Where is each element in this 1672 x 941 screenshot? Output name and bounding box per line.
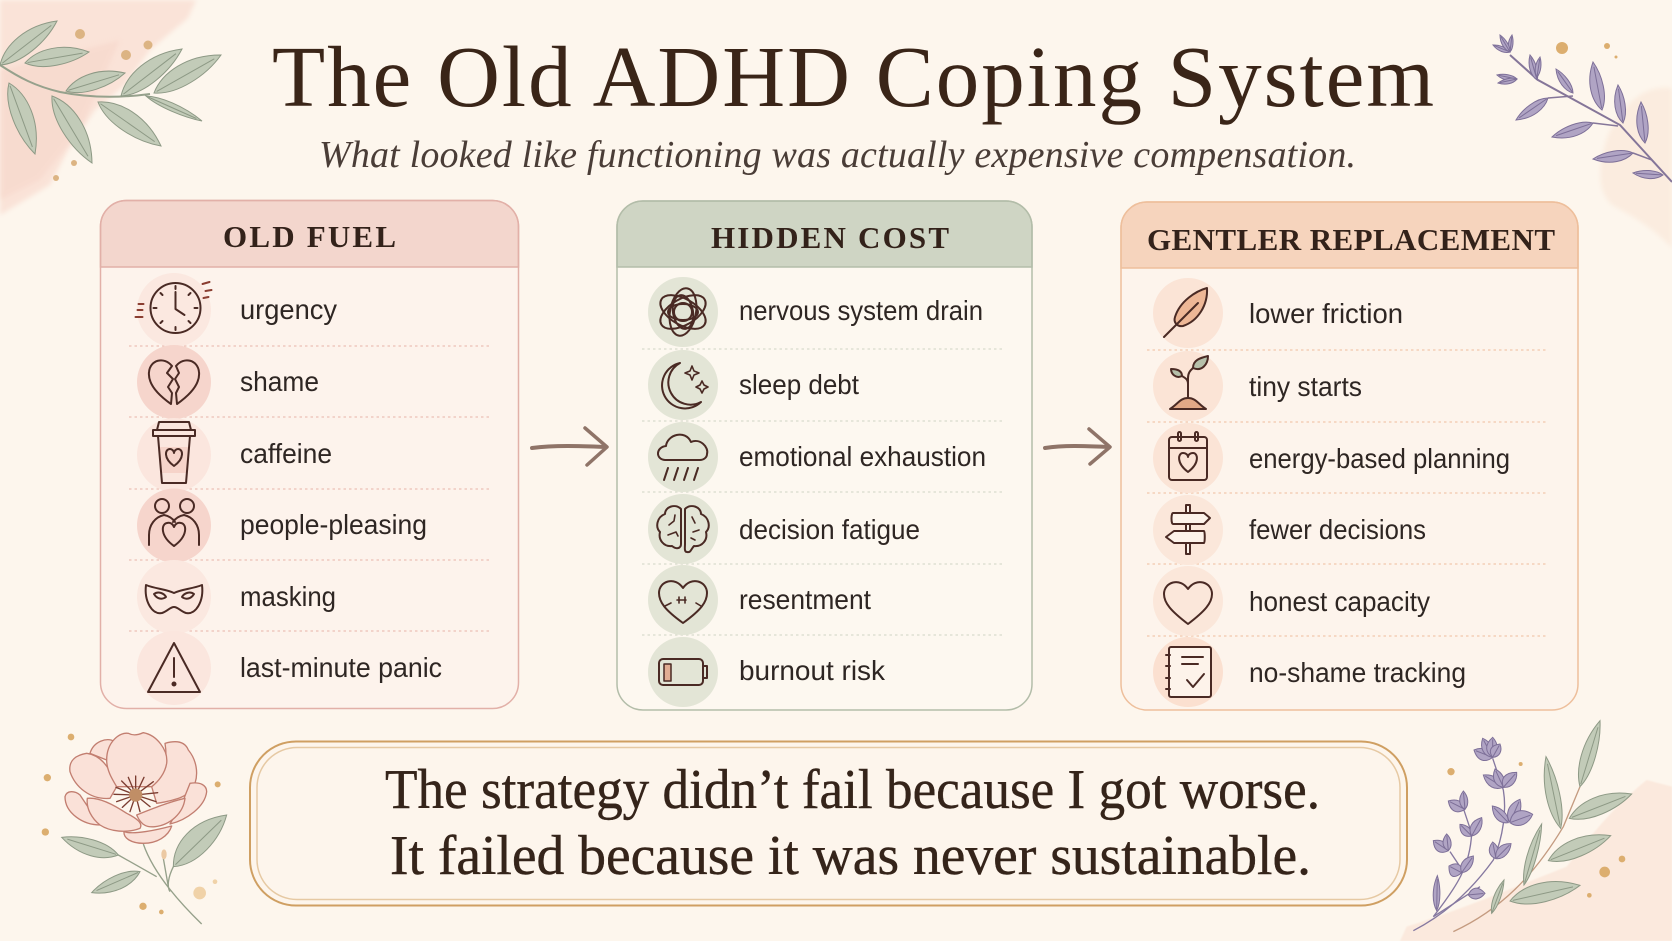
- icon: feather: [1164, 288, 1207, 337]
- row: fewer decisions: [1153, 495, 1426, 565]
- row: decision fatigue: decision fatigue: [739, 514, 920, 545]
- row: nervous system drain: [648, 277, 983, 347]
- row: caffeine: caffeine: [240, 438, 332, 469]
- row: honest capacity: honest capacity: [1249, 586, 1430, 617]
- row: honest capacity: [1153, 566, 1430, 636]
- quote banner: The strategy didn’t fail because I got worse.: [385, 759, 1320, 821]
- row: decision fatigue: [648, 494, 920, 564]
- row: resentment: [648, 565, 871, 635]
- panel: old fuel: [100, 200, 518, 708]
- panel: gentler replacement: [1121, 202, 1578, 710]
- icon: warning triangle: [148, 643, 200, 692]
- decoration: top-left watercolor and leaves: [0, 0, 225, 215]
- row: no-shame tracking: no-shame tracking: [1249, 657, 1466, 688]
- row: shame: [137, 345, 319, 419]
- row: last-minute panic: last-minute panic: [240, 652, 442, 683]
- row: urgency: urgency: [240, 294, 337, 325]
- hidden cost header: [617, 201, 1032, 267]
- row: caffeine: [137, 418, 332, 492]
- hidden cost header: HIDDEN COST: [711, 220, 949, 255]
- title: The Old ADHD Coping System: [272, 28, 1434, 125]
- decoration: top-right lavender sprig: [1492, 34, 1672, 248]
- icon: calendar with heart: [1169, 432, 1207, 480]
- icon: people with heart: [149, 499, 199, 546]
- row: people-pleasing: people-pleasing: [240, 509, 427, 540]
- quote banner: [250, 742, 1407, 906]
- icon: heart: [1164, 582, 1212, 624]
- row: masking: [137, 560, 336, 634]
- arrow: hidden cost to gentler replacement: [1045, 429, 1110, 464]
- row: last-minute panic: [137, 631, 442, 705]
- row: lower friction: [1153, 278, 1403, 348]
- row: energy-based planning: energy-based planning: [1249, 443, 1510, 474]
- row: resentment: resentment: [739, 584, 871, 615]
- decoration: bottom-right lavender and leaves: [1400, 718, 1672, 941]
- icon: coffee cup: [153, 422, 195, 483]
- old fuel header: OLD FUEL: [223, 219, 396, 254]
- row: fewer decisions: fewer decisions: [1249, 514, 1426, 545]
- gentler replacement header: GENTLER REPLACEMENT: [1147, 222, 1555, 257]
- icon: signpost: [1166, 505, 1210, 554]
- row: lower friction: lower friction: [1249, 298, 1403, 329]
- icon: brain: [657, 506, 709, 552]
- old fuel header: [100, 200, 518, 267]
- row: emotional exhaustion: emotional exhaustion: [739, 441, 986, 472]
- quote banner: It failed because it was never sustainable.: [390, 825, 1311, 887]
- icon: tangled scribble: [655, 286, 711, 338]
- icon: clock: [136, 282, 212, 333]
- arrow: old fuel to hidden cost: [532, 428, 607, 465]
- row: nervous system drain: nervous system drain: [739, 295, 983, 326]
- icon: cracked heart: [659, 581, 707, 623]
- icon: mask: [146, 585, 202, 613]
- row: people-pleasing: [137, 488, 427, 562]
- row: burnout risk: burnout risk: [739, 655, 886, 686]
- row: masking: masking: [240, 581, 336, 612]
- icon: sprout: [1170, 356, 1208, 409]
- icon: moon and stars: [662, 363, 708, 408]
- icon: low battery: [659, 659, 707, 685]
- icon: broken heart: [149, 360, 199, 404]
- icon: checklist: [1166, 647, 1211, 697]
- row: tiny starts: tiny starts: [1249, 371, 1362, 402]
- icon: rain cloud: [658, 435, 707, 480]
- decoration: flower bottom-left: [42, 733, 234, 924]
- row: tiny starts: [1153, 351, 1362, 421]
- gentler replacement header: [1121, 202, 1578, 268]
- row: shame: shame: [240, 366, 319, 397]
- row: energy-based planning: [1153, 423, 1510, 493]
- row: burnout risk: [648, 637, 886, 707]
- row: no-shame tracking: [1153, 637, 1466, 707]
- row: sleep debt: sleep debt: [739, 369, 859, 400]
- panel: hidden cost: [617, 201, 1032, 710]
- row: urgency: [136, 273, 337, 347]
- row: emotional exhaustion: [648, 422, 986, 492]
- subtitle: What looked like functioning was actually expensive compensation.: [319, 134, 1356, 176]
- row: sleep debt: [648, 350, 859, 420]
